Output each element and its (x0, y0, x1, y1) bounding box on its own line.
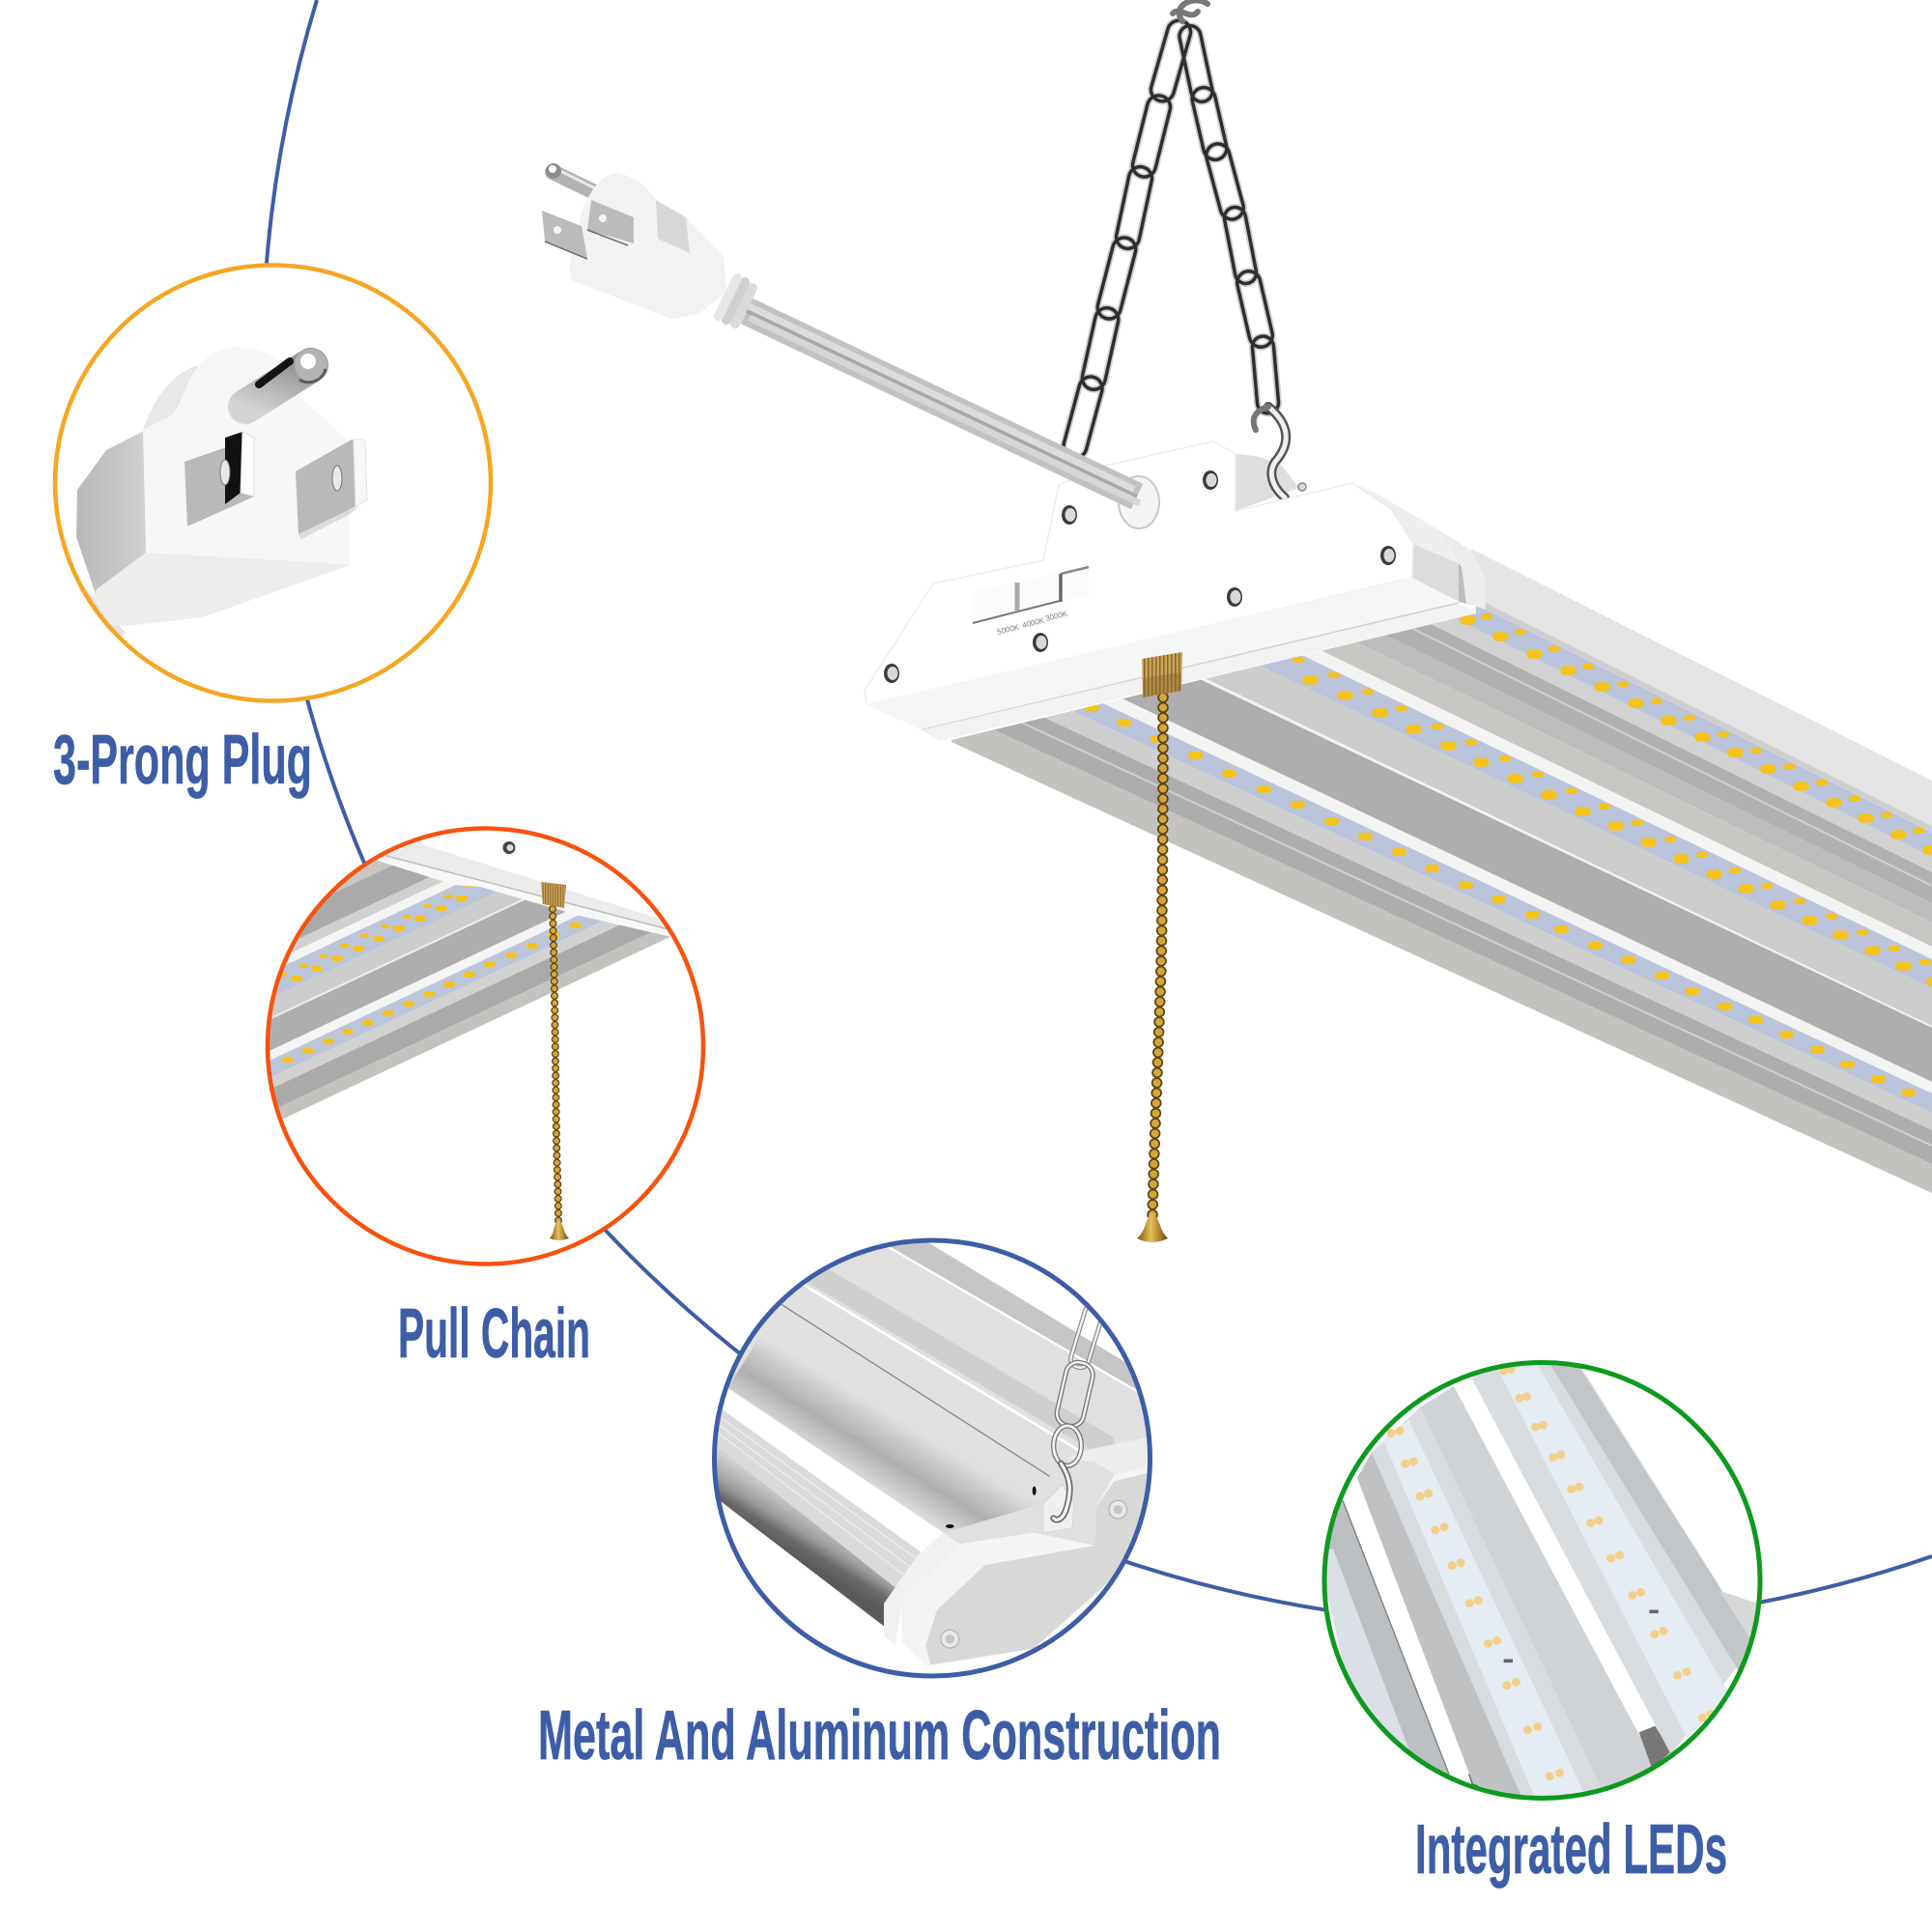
ring (715, 1240, 1150, 1676)
LED chips (1089, 616, 1932, 1093)
head band (388, 842, 666, 927)
product: pull chain (1137, 652, 1182, 1242)
top plate (865, 441, 1413, 705)
ground pin (245, 349, 327, 407)
end caps (1436, 528, 1486, 610)
product: power cord (719, 278, 1159, 528)
housing close-up (708, 1235, 1162, 1666)
plug close-up (76, 347, 367, 636)
product: brightness switch: 3000K (1044, 609, 1069, 623)
label: 3-Prong Plug: 3-Prong Plug (53, 721, 312, 799)
panel: metal and aluminum inset (708, 1235, 1162, 1677)
label: Pull Chain: Pull Chain (398, 1294, 590, 1373)
product: plug (542, 163, 726, 319)
product: screws (884, 470, 1396, 683)
ring (1324, 1362, 1760, 1799)
front band (865, 578, 1459, 729)
panel: 3-prong plug inset (54, 264, 493, 702)
left prong (185, 432, 254, 526)
chain mount recess (1236, 454, 1299, 511)
end cap (884, 1436, 1152, 1666)
panel: pull chain inset (265, 826, 705, 1266)
fixture close-up (270, 841, 670, 1119)
right prong (296, 440, 367, 539)
LED chips (1391, 1369, 1711, 1776)
product: brightness switch: 4000K (1021, 615, 1046, 630)
ring (268, 829, 703, 1264)
panel: integrated LEDs inset (1317, 1361, 1762, 1800)
label: Metal And Aluminum Construction: Metal And Aluminum Construction (538, 1696, 1221, 1775)
LED close-up (1317, 1362, 1758, 1800)
product: hanging chains (1061, 0, 1306, 497)
mini pull chain (541, 882, 569, 1240)
product: brightness switch: 5000K (996, 622, 1021, 637)
ring (55, 265, 491, 701)
chain and hook (1043, 1303, 1105, 1533)
product: light fixture body (864, 440, 1932, 1193)
panel bands (952, 549, 1932, 1193)
connector curve (263, 0, 1932, 1625)
lower lip (921, 603, 1476, 741)
product: brightness switch (973, 567, 1089, 637)
